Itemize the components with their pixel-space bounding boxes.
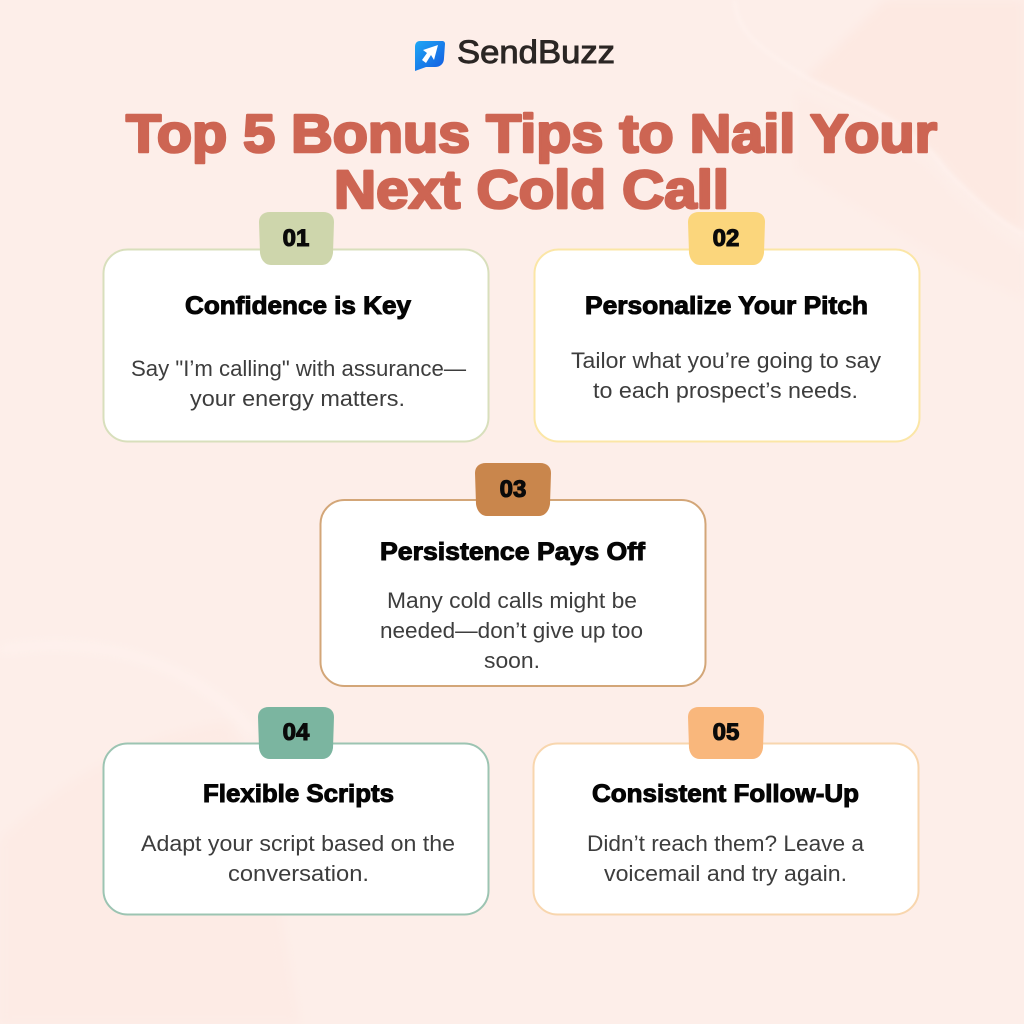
body text: needed—don’t give up too bbox=[380, 618, 643, 643]
body text: Many cold calls might be bbox=[387, 588, 637, 613]
panel: tip 04 bbox=[104, 707, 488, 914]
body text: soon. bbox=[484, 648, 540, 673]
badge 04: 04 bbox=[283, 719, 310, 746]
heading: Personalize Your Pitch bbox=[585, 292, 868, 320]
badge 02: 02 bbox=[713, 225, 739, 252]
badge 03 bbox=[475, 463, 551, 516]
badge 04 bbox=[258, 707, 334, 759]
badge 03: 03 bbox=[500, 476, 526, 503]
body text: voicemail and try again. bbox=[604, 861, 847, 886]
panel: tip 01 bbox=[104, 212, 488, 442]
badge 05: 05 bbox=[713, 719, 739, 746]
body text: conversation. bbox=[228, 861, 369, 886]
panel: tip 05 bbox=[534, 707, 918, 914]
badge 01 bbox=[259, 212, 334, 265]
title: Top 5 Bonus Tips to Nail Your bbox=[126, 104, 937, 164]
body text: Adapt your script based on the bbox=[141, 831, 455, 856]
body text: Tailor what you’re going to say bbox=[571, 348, 882, 373]
badge 02 bbox=[688, 212, 765, 265]
body text bbox=[380, 588, 643, 673]
title bbox=[126, 104, 937, 220]
body text: Say "I’m calling" with assurance— bbox=[131, 356, 466, 381]
logo: SendBuzz bbox=[415, 34, 615, 71]
body text: Didn’t reach them? Leave a bbox=[587, 831, 864, 856]
body text bbox=[571, 348, 882, 403]
body text bbox=[587, 831, 864, 886]
badge 01: 01 bbox=[283, 225, 309, 252]
body text: to each prospect’s needs. bbox=[593, 378, 858, 403]
panel: tip 02 bbox=[534, 212, 920, 442]
heading: Consistent Follow-Up bbox=[592, 780, 859, 808]
body text bbox=[141, 831, 455, 886]
icon: blue send arrow speech bubble bbox=[415, 41, 445, 71]
panel: tip 03 bbox=[320, 463, 706, 686]
brand name: SendBuzz bbox=[457, 34, 615, 70]
body text: your energy matters. bbox=[190, 386, 405, 411]
body text bbox=[131, 356, 466, 411]
heading: Persistence Pays Off bbox=[380, 538, 646, 566]
title: Next Cold Call bbox=[334, 160, 729, 220]
badge 05 bbox=[688, 707, 764, 759]
heading: Confidence is Key bbox=[185, 292, 411, 320]
heading: Flexible Scripts bbox=[203, 780, 394, 808]
